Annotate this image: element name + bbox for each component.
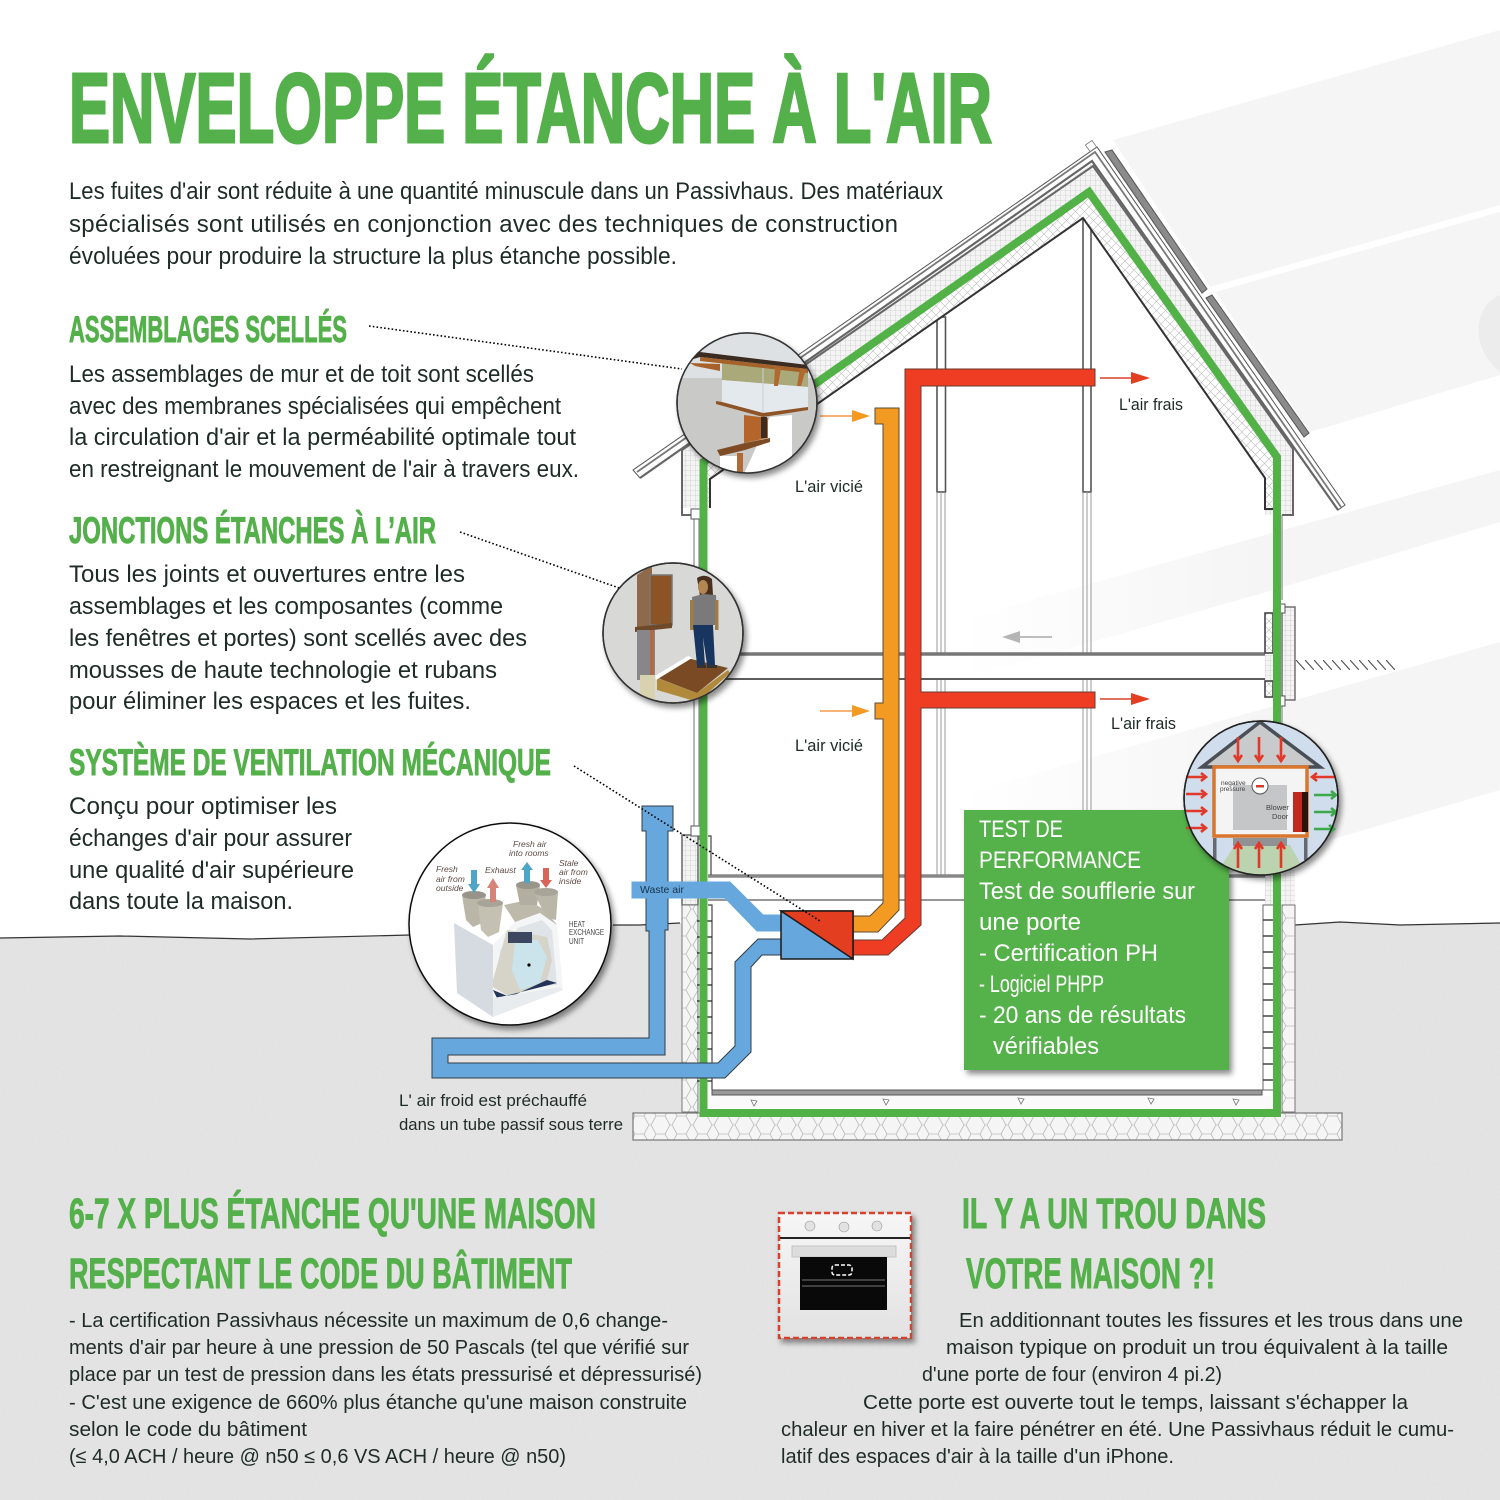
solar panels: [1105, 150, 1309, 437]
text: ventilation: échanges d'air pour assurer: [69, 825, 352, 852]
heading: 6-7 x: 6-7 X PLUS ÉTANCHE QU'UNE MAISON: [69, 1190, 596, 1238]
circle: heat recovery unit: [409, 823, 611, 1025]
text: assemblages: avec des membranes spécialisées qui empêchent: [69, 393, 561, 420]
text: certification: - C'est une exigence de 660% plus étanche qu'une maison construite: [69, 1392, 687, 1414]
text: jonctions: [69, 561, 527, 715]
ground: [0, 922, 1500, 1500]
unit labels: air from: [559, 867, 588, 877]
text: assemblages: Les assemblages de mur et de toit sont scellés: [69, 361, 534, 388]
air flow arrows: [820, 372, 1150, 717]
green box: performance test: Test de soufflerie sur: [979, 878, 1195, 905]
text: certification: - La certification Passivhaus nécessite un maximum de 0,6 change-: [69, 1310, 668, 1332]
green box: performance test: - 20 ans de résultats: [979, 1002, 1186, 1029]
heading: 6-7 x: RESPECTANT LE CODE DU BÂTIMENT: [69, 1249, 572, 1298]
text: certification: ments d'air par heure à une pression de 50 Pascals (tel que vérifié sur: [69, 1337, 689, 1359]
circle: blower door test: [1184, 721, 1338, 880]
unit labels: HEAT: [569, 920, 585, 929]
text: ventilation: une qualité d'air supérieure: [69, 857, 354, 884]
ground line: [0, 922, 1500, 939]
text: ventilation: dans toute la maison.: [69, 888, 293, 915]
unit body: [454, 881, 563, 1017]
green box: performance test: - Certification PH: [979, 940, 1158, 967]
intro text: Les fuites d'air sont réduite à une quantité minuscule dans un Passivhaus. Des matériaux: [69, 178, 943, 205]
airtight green envelope line: [704, 192, 1277, 1113]
unit labels: into rooms: [509, 848, 549, 858]
unit labels: [436, 839, 604, 946]
wall ties: [697, 920, 1275, 1081]
green box: performance test: [964, 810, 1229, 1070]
preheat caption: dans un tube passif sous terre: [399, 1116, 623, 1134]
air labels: L'air frais: [1111, 715, 1176, 733]
text: assemblages: la circulation d'air et la perméabilité optimale tout: [69, 424, 576, 451]
text: ventilation: [69, 793, 354, 915]
text: ventilation: Conçu pour optimiser les: [69, 793, 337, 820]
green box: performance test: vérifiables: [993, 1033, 1099, 1060]
heading: 6-7 x: [69, 1190, 596, 1298]
unit labels: Fresh air: [513, 839, 548, 849]
pressure arrows: [1186, 737, 1336, 868]
text: certification: [69, 1310, 702, 1468]
orange stale air duct: [853, 408, 899, 932]
faint background bands: [960, 30, 1500, 870]
roof strip: [633, 140, 1345, 510]
text: assemblages: [69, 361, 579, 483]
heading: trou: VOTRE MAISON ?!: [966, 1250, 1215, 1298]
text: jonctions: assemblages et les composantes (comme: [69, 593, 503, 620]
green box: performance test: TEST DE: [979, 816, 1063, 843]
intro text: spécialisés sont utilisés en conjonction avec des techniques de construction: [69, 211, 898, 238]
unit labels: EXCHANGE: [569, 928, 604, 937]
heading: ventilation: SYSTÈME DE VENTILATION MÉCANIQUE: [69, 742, 551, 783]
unit labels: Exhaust: [485, 865, 516, 875]
intro text: [69, 178, 943, 270]
text: assemblages: en restreignant le mouvement de l'air à travers eux.: [69, 456, 579, 483]
floors: [707, 654, 1265, 900]
red fresh air duct: [853, 369, 1095, 955]
heat exchanger box: [781, 911, 853, 959]
text: certification: (≤ 4,0 ACH / heure @ n50 ≤ 0,6 VS ACH / heure @ n50): [69, 1446, 566, 1468]
house section drawing: [633, 140, 1395, 1140]
preheat caption: [399, 1092, 623, 1134]
circle: window junction detail with person: [603, 563, 743, 705]
foundation slab: [633, 1090, 1342, 1140]
insulation envelope: [682, 163, 1293, 515]
air labels: [795, 396, 1183, 755]
unit labels: Fresh: [436, 864, 458, 874]
text: certification: place par un test de pression dans les états pressurisé et dépressurisé): [69, 1364, 702, 1386]
left wall: [682, 509, 712, 1112]
air labels: L'air vicié: [795, 737, 863, 755]
text: trou: [781, 1310, 1463, 1468]
text: jonctions: mousses de haute technologie et rubans: [69, 657, 497, 684]
pressure labels: pressure: [1220, 786, 1246, 793]
unit airflow arrows: [468, 862, 552, 902]
text: certification: selon le code du bâtiment: [69, 1419, 307, 1441]
green box: performance test: une porte: [979, 909, 1081, 936]
pressure labels: Blower: [1266, 803, 1289, 812]
unit labels: UNIT: [569, 937, 584, 946]
text: trou: chaleur en hiver et la faire pénétrer en été. Une Passivhaus réduit le cumu-: [781, 1419, 1454, 1441]
waste air label: Waste air: [640, 884, 684, 896]
leader lines: [369, 326, 820, 921]
circle: roof assembly detail: [670, 330, 830, 476]
title: ENVELOPPE ÉTANCHE À L'AIR: [69, 53, 992, 163]
heading: trou: [962, 1190, 1266, 1298]
green box: performance test: PERFORMANCE: [979, 847, 1141, 874]
house interior: [683, 905, 1295, 1113]
unit labels: Stale: [559, 858, 579, 868]
centre partition walls: [937, 218, 1091, 876]
intro text: évoluées pour produire la structure la plus étanche possible.: [69, 243, 677, 270]
text: trou: latif des espaces d'air à la taille d'un iPhone.: [781, 1446, 1174, 1468]
air labels: L'air vicié: [795, 478, 863, 496]
heading: assemblages: ASSEMBLAGES SCELLÉS: [69, 309, 347, 350]
icon: oven: [779, 1213, 911, 1338]
pressure labels: Door: [1272, 812, 1289, 821]
heading: jonctions: JONCTIONS ÉTANCHES À L’AIR: [69, 510, 436, 551]
right wall and balcony: [1263, 515, 1395, 1112]
text: trou: d'une porte de four (environ 4 pi.2): [922, 1364, 1222, 1386]
text: trou: En additionnant toutes les fissures et les trous dans une: [959, 1310, 1463, 1332]
preheat caption: L' air froid est préchauffé: [399, 1092, 587, 1110]
pressure labels: [1220, 778, 1289, 821]
text: jonctions: Tous les joints et ouvertures entre les: [69, 561, 465, 588]
unit labels: air from: [436, 874, 465, 884]
text: trou: maison typique on produit un trou équivalent à la taille: [946, 1337, 1448, 1359]
green box: performance test: - Logiciel PHPP: [979, 971, 1104, 998]
text: jonctions: les fenêtres et portes) sont scellés avec des: [69, 625, 527, 652]
blue intake and waste ducts: [432, 806, 781, 1078]
air labels: L'air frais: [1119, 396, 1183, 414]
text: trou: Cette porte est ouverte tout le temps, laissant s'échapper la: [863, 1392, 1409, 1414]
heading: trou: IL Y A UN TROU DANS: [962, 1190, 1266, 1238]
ground speckle: [0, 922, 1500, 1500]
pressure labels: negative: [1221, 780, 1246, 787]
text: jonctions: pour éliminer les espaces et les fuites.: [69, 688, 471, 715]
unit labels: inside: [559, 876, 581, 886]
unit labels: outside: [436, 883, 464, 893]
